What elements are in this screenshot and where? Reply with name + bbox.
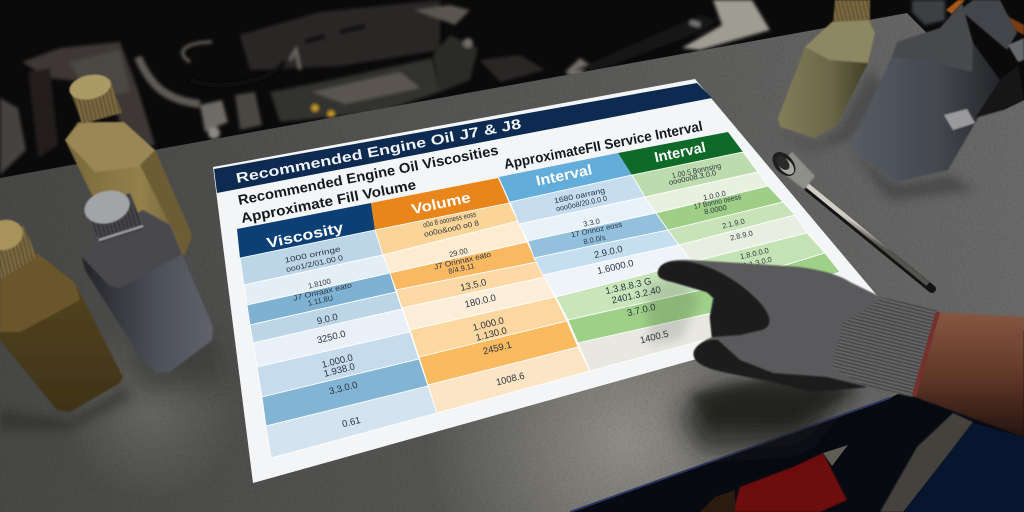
values: green interval column: 1.0.0.0 xyxy=(702,189,727,202)
jug label xyxy=(944,109,975,130)
glove ribbed cuff xyxy=(832,298,937,395)
paper chart xyxy=(213,79,885,483)
values: green interval column: 8.0000 xyxy=(703,203,728,216)
glove index finger coating xyxy=(658,261,770,337)
values: viscosity column: 1000 orringe xyxy=(284,244,341,265)
values: viscosity column xyxy=(284,244,362,430)
values: viscosity column: 1.000.0 xyxy=(321,352,354,371)
values: viscosity column: 0.61 xyxy=(341,415,362,430)
values: viscosity column: ooo1/2/01.00 0 xyxy=(285,253,344,274)
glove palm coating xyxy=(694,340,868,393)
values: blue interval column: 2.9.0.0 xyxy=(593,244,624,261)
forearm xyxy=(912,312,1024,437)
values: volume column: 8/4.9.11 xyxy=(447,261,475,276)
values: green interval column: 2.1.9.0 xyxy=(721,217,746,231)
column headers: Volume xyxy=(410,190,472,218)
shadows on bench xyxy=(0,70,975,452)
lower cabinet below the bench xyxy=(570,360,1024,512)
values: viscosity column: J7 Oriraax eato xyxy=(292,280,353,303)
subtitle right: ApproximateFII Service Interval xyxy=(503,118,704,172)
values: blue interval column: 8.0.0/s xyxy=(583,233,607,246)
values: volume column: 2459.1 xyxy=(482,340,513,357)
oil bottle: gold, rear right xyxy=(778,0,875,138)
values: volume column: J7 Orinnax eato xyxy=(433,250,492,271)
oil bottle: grey, front left xyxy=(81,186,213,373)
values: volume column: o0o 8 oooness eoss xyxy=(422,209,477,230)
values: viscosity column: 1.11.8U xyxy=(307,293,334,308)
oil bottle: gold, rear left xyxy=(65,71,192,255)
values: green interval column: 2.8.9.0 xyxy=(729,229,754,243)
column: viscosity xyxy=(237,203,437,458)
values: viscosity column: 1.8100 xyxy=(307,277,332,291)
values: volume column: 1.130.0 xyxy=(475,325,508,344)
values: volume column: 1008.6 xyxy=(495,371,526,388)
oil bottle: gold, front left xyxy=(0,216,123,412)
values: viscosity column: 3250.0 xyxy=(316,329,347,346)
column headers: Interval xyxy=(535,162,594,190)
values: viscosity column: 3.3.0.0 xyxy=(328,380,359,397)
values: viscosity column: 9.0.0 xyxy=(316,312,339,327)
column headers: Interval xyxy=(653,140,707,166)
values: blue interval column: 1.3.8.8.3 G xyxy=(604,276,653,297)
column: volume xyxy=(371,178,590,413)
values: green interval column xyxy=(668,161,773,270)
values: blue interval column: 17 Orinoz eoss xyxy=(570,220,623,239)
column headers: Viscosity xyxy=(265,220,345,252)
values: viscosity column: 1.938.0 xyxy=(323,361,356,380)
shadow on chart under the finger xyxy=(645,275,700,345)
paper sheet xyxy=(213,79,885,483)
values: blue interval column: 3.3.0 xyxy=(582,216,601,229)
title text: Recommended Engine Oil J7 & J8 xyxy=(235,115,523,186)
subtitle left: Approximate Fill Volume xyxy=(240,176,418,226)
values: green interval column: 17 Bonno oeess xyxy=(693,192,742,211)
values: volume column xyxy=(422,209,526,388)
glove body xyxy=(658,260,937,397)
values: green interval column: 1.8.0.0.0 xyxy=(739,246,770,261)
values: volume column: 1.000.0 xyxy=(472,315,505,334)
values: blue interval column: 1400.5 xyxy=(639,329,670,346)
values: blue interval column: 2401.3.2.40 xyxy=(611,285,662,307)
values: blue interval column: 1.6000.0 xyxy=(596,258,635,277)
values: green interval column: 1.1.3.0.0 xyxy=(742,255,773,270)
dipstick tool xyxy=(768,148,932,289)
values: green interval column: 1.00.5 Bonnsing xyxy=(671,161,722,180)
column: interval green xyxy=(618,132,840,310)
values: blue interval column: 3.7.0.0 xyxy=(626,302,657,319)
values: volume column: oo0o&oo0 o0 8 xyxy=(423,218,480,239)
values: volume column: 13.5.0 xyxy=(459,277,488,294)
values: blue interval column: 1680 oarrang xyxy=(553,186,606,205)
values: volume column: 29.00 xyxy=(448,246,469,259)
values: blue interval column: ooo0o8/20.0.0 0 xyxy=(555,194,608,213)
column: interval blue xyxy=(499,153,745,371)
title band xyxy=(214,83,712,193)
subtitle left: Recommended Engine Oil Viscosities xyxy=(237,142,500,208)
gloved hand pointing xyxy=(658,260,938,397)
values: volume column: 180.0.0 xyxy=(464,293,497,310)
oil jug: grey, right xyxy=(852,0,1024,182)
engine bay background xyxy=(0,0,1024,200)
cuff red band xyxy=(914,312,938,396)
values: blue interval column xyxy=(553,186,670,346)
values: green interval column: ooo0o08.3.0.0 xyxy=(668,168,717,187)
column headers xyxy=(265,140,707,252)
